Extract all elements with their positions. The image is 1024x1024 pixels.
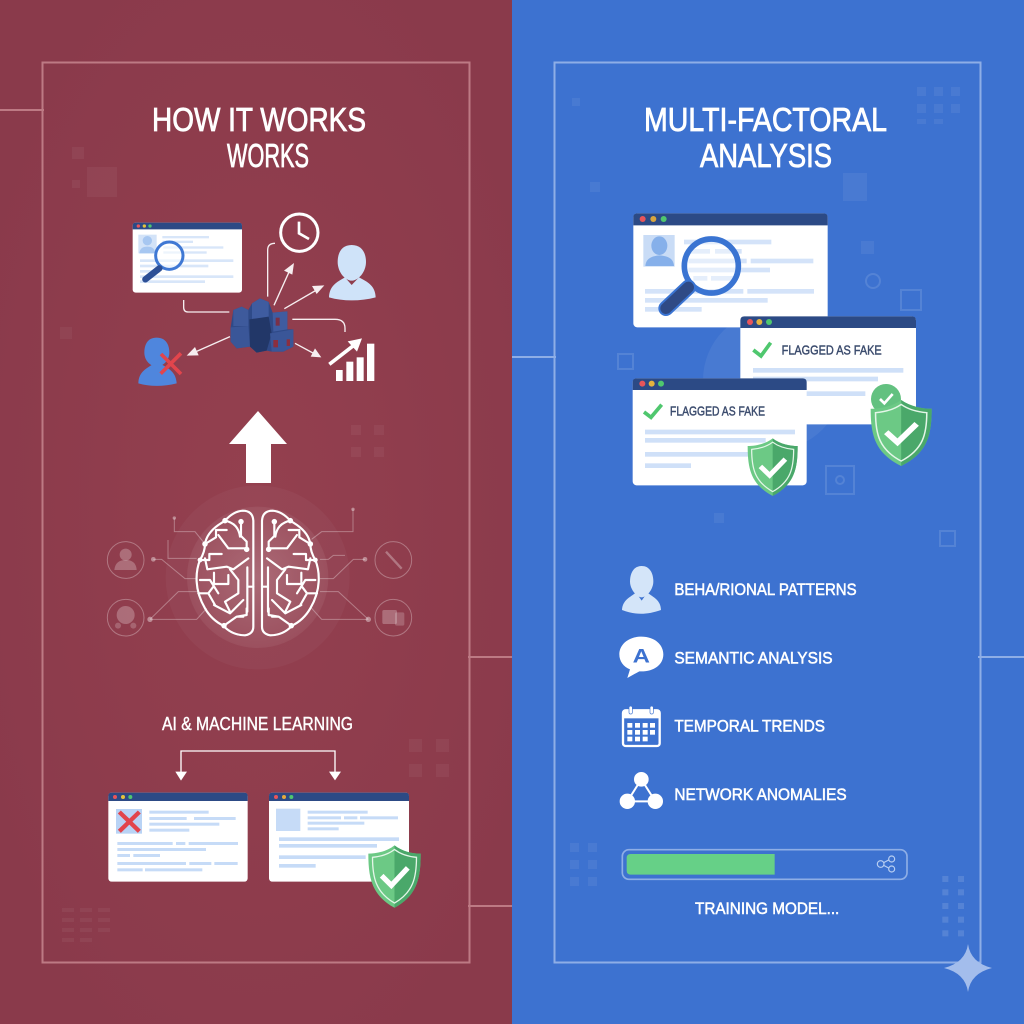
connector lines on panel edges bbox=[0, 110, 1024, 906]
icon: data cubes bbox=[231, 298, 293, 353]
frame: left panel border bbox=[42, 62, 470, 962]
icon: growth chart bbox=[329, 338, 374, 381]
factor list bbox=[619, 566, 857, 809]
icon: profile circle bbox=[107, 542, 144, 578]
browser window with magnifier bbox=[133, 223, 242, 293]
icon: user group circle bbox=[107, 599, 144, 636]
window: verified review bbox=[269, 793, 409, 882]
flagged review windows bbox=[633, 213, 932, 496]
window: flagged as fake, back bbox=[740, 316, 916, 424]
title: multi-factoral analysis: MULTI-FACTORAL bbox=[644, 101, 887, 138]
item: behavioral patterns: BEHA/RIONAL PATTERNS bbox=[674, 580, 857, 599]
progress bar bbox=[622, 850, 907, 879]
label: AI and machine learning: AI & MACHINE LEARNING bbox=[162, 714, 353, 734]
data network diagram bbox=[133, 214, 376, 386]
icon: clock bbox=[281, 214, 318, 251]
title: how it works: HOW IT WORKS bbox=[152, 101, 366, 138]
window: rejected review bbox=[108, 793, 248, 882]
arrow: large up arrow bbox=[229, 411, 287, 483]
item: semantic analysis: SEMANTIC ANALYSIS bbox=[674, 648, 833, 667]
panel: how it works background bbox=[0, 0, 512, 1024]
item: network anomalies: NETWORK ANOMALIES bbox=[674, 785, 847, 804]
window: flagged as fake, back: FLAGGED AS FAKE bbox=[782, 342, 882, 357]
window: flagged as fake, front bbox=[633, 378, 807, 485]
frame: right panel border bbox=[554, 62, 980, 962]
side circuit lines bbox=[147, 508, 371, 622]
icon: chat circle bbox=[375, 599, 412, 636]
icon: user bbox=[329, 245, 376, 300]
item: network anomalies bbox=[620, 772, 847, 809]
branching arrow bbox=[175, 751, 341, 781]
glow rings bbox=[166, 485, 350, 669]
window: flagged as fake, front: FLAGGED AS FAKE bbox=[670, 404, 765, 419]
title: multi-factoral analysis: ANALYSIS bbox=[700, 137, 832, 174]
item: semantic analysis bbox=[619, 637, 833, 678]
item: behavioral patterns bbox=[622, 566, 857, 614]
status: training model: TRAINING MODEL... bbox=[695, 899, 839, 918]
title: multi-factoral analysis bbox=[644, 101, 887, 174]
icon: rejected user bbox=[138, 338, 181, 386]
right decorative shapes bbox=[570, 87, 960, 886]
item: semantic analysis: A bbox=[633, 647, 650, 668]
dot grid bbox=[942, 876, 964, 936]
icon: sparkle bbox=[944, 944, 992, 992]
window: profile inspection bbox=[633, 213, 828, 327]
icon: brain bbox=[197, 511, 319, 635]
icon: shield, back window bbox=[871, 384, 932, 466]
panel: multi-factoral background bbox=[512, 0, 1024, 1024]
training progress section bbox=[622, 850, 992, 992]
left decorative squares bbox=[60, 147, 449, 942]
title: how it works: WORKS bbox=[227, 137, 309, 174]
title: how it works bbox=[152, 101, 366, 174]
item: temporal trends bbox=[623, 706, 825, 746]
brain with AI circuit connections bbox=[107, 485, 412, 669]
results section bbox=[108, 751, 421, 908]
icon: green shield bbox=[368, 845, 421, 908]
icon: slash circle bbox=[375, 542, 412, 578]
item: temporal trends: TEMPORAL TRENDS bbox=[674, 717, 825, 736]
icon: shield, front window bbox=[748, 438, 798, 496]
connector lines and arrows bbox=[184, 243, 345, 357]
